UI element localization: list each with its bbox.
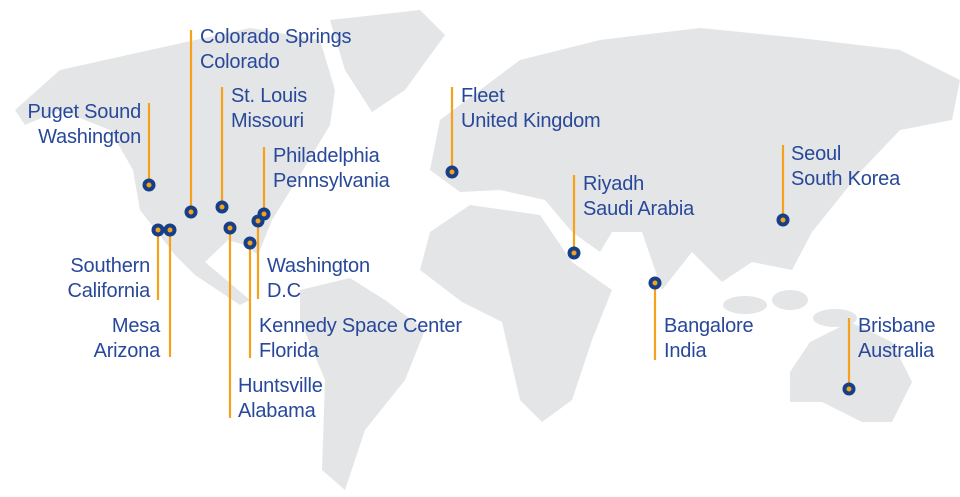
label: Kennedy Space Center: Kennedy Space Center: [259, 315, 462, 337]
label: Bangalore: Bangalore: [664, 315, 753, 337]
label: Southern California: Southern: [70, 255, 150, 277]
label: Riyadh: Saudi Arabia: [583, 198, 694, 220]
label: Colorado Springs: Colorado: [200, 51, 280, 73]
label: Southern California: [68, 255, 150, 302]
label: Mesa: Mesa: [112, 315, 160, 337]
label: Mesa: Arizona: [94, 340, 160, 362]
label: Philadelphia: Pennsylvania: [273, 170, 390, 192]
label: Seoul: [791, 143, 900, 190]
label: Puget Sound: [28, 101, 141, 148]
label: Seoul: South Korea: [791, 168, 900, 190]
label: Huntsville: Alabama: [238, 400, 316, 422]
label: Southern California: California: [68, 280, 150, 302]
label: Brisbane: Australia: [858, 340, 934, 362]
label: Colorado Springs: [200, 26, 351, 73]
label: Philadelphia: Philadelphia: [273, 145, 380, 167]
label: Huntsville: [238, 375, 323, 422]
label: Huntsville: Huntsville: [238, 375, 323, 397]
label: Colorado Springs: Colorado Springs: [200, 26, 351, 48]
label: Puget Sound: Washington: [38, 126, 141, 148]
label: Washington DC: [267, 255, 370, 302]
label: Fleet: Fleet: [461, 85, 504, 107]
label: Brisbane: Brisbane: [858, 315, 935, 337]
label: Washington DC: D.C: [267, 280, 301, 302]
label: Bangalore: [664, 315, 753, 362]
label: Mesa: [94, 315, 160, 362]
label: Fleet: United Kingdom: [461, 110, 601, 132]
label: Kennedy Space Center: [259, 315, 462, 362]
label: Bangalore: India: [664, 340, 706, 362]
label: Riyadh: Riyadh: [583, 173, 644, 195]
label: St. Louis: [231, 85, 307, 132]
label: Kennedy Space Center: Florida: [259, 340, 319, 362]
label: St. Louis: Missouri: [231, 110, 304, 132]
label: Seoul: Seoul: [791, 143, 841, 165]
label: Fleet: [461, 85, 601, 132]
label: Puget Sound: Puget Sound: [28, 101, 141, 123]
label: Riyadh: [583, 173, 694, 220]
label: Philadelphia: [273, 145, 390, 192]
label: Brisbane: [858, 315, 935, 362]
label: Washington DC: Washington: [267, 255, 370, 277]
label: St. Louis: St. Louis: [231, 85, 307, 107]
